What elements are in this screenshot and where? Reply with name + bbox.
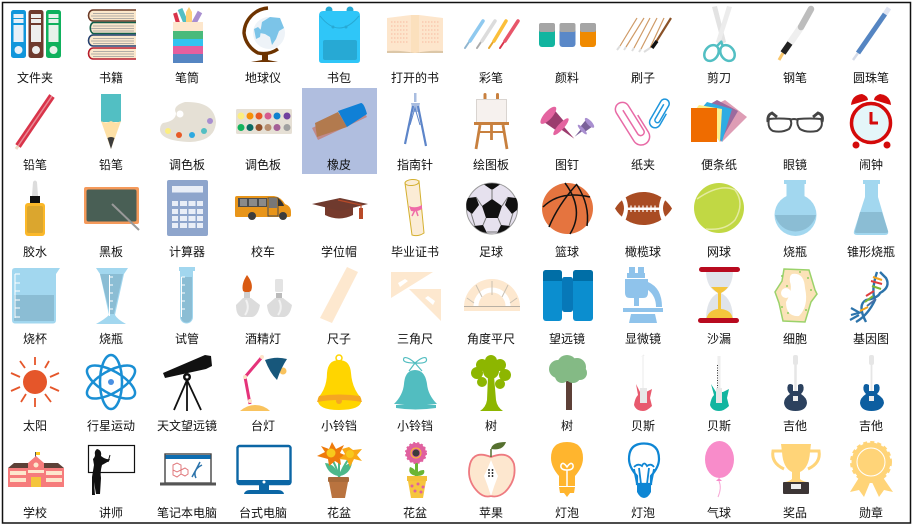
label: 调色板 — [169, 158, 205, 172]
label: 地球仪 — [245, 71, 281, 85]
label: 绘图板 — [473, 157, 509, 172]
cell: eraser — [312, 103, 367, 172]
cell: microscope — [623, 267, 663, 346]
icon: balloon — [705, 441, 734, 497]
cell: hourglass — [698, 267, 740, 346]
cell: desktop computer — [237, 446, 291, 520]
label: 灯泡 — [555, 506, 579, 520]
icon: open book — [387, 15, 443, 53]
label: 烧瓶 — [783, 245, 807, 259]
label: 花盆 — [403, 505, 427, 520]
label: 吉他 — [859, 419, 883, 433]
cell: diploma — [391, 179, 439, 259]
label: 计算器 — [169, 244, 205, 259]
label: 铅笔 — [99, 157, 123, 172]
cell: trophy — [773, 444, 819, 520]
label: 小铃铛 — [321, 418, 357, 433]
cell: teal bass — [707, 356, 731, 433]
cell: red pencil — [16, 96, 52, 172]
icon: test tube — [179, 267, 195, 324]
icon: apple — [469, 442, 515, 496]
cell: soccer ball — [466, 183, 518, 259]
cell: palette — [160, 102, 216, 172]
icon: teal bass — [710, 356, 729, 411]
icon: binoculars — [543, 270, 593, 321]
cell: desk lamp — [240, 355, 287, 433]
cell: paper clips — [613, 97, 673, 172]
icon: biological cell — [775, 269, 817, 322]
label: 调色板 — [245, 158, 281, 172]
icon: lecturer — [88, 446, 134, 495]
cell: apple — [469, 442, 515, 520]
icon: beaker — [12, 268, 60, 324]
icon: sun — [11, 357, 59, 407]
icon: astronomical telescope — [163, 355, 212, 411]
label: 台式电脑 — [239, 505, 287, 520]
label: 刷子 — [631, 71, 655, 85]
label: 贝斯 — [631, 419, 655, 433]
label: 天文望远镜 — [157, 418, 217, 433]
icon: teal bell with bow — [394, 358, 437, 410]
cell: fountain pen — [779, 9, 811, 85]
cell: atom — [82, 355, 140, 433]
icon: globe — [244, 8, 285, 62]
cell: test tube — [175, 267, 199, 346]
cell: balloon — [705, 441, 734, 520]
icon: flower pot — [317, 442, 362, 498]
icon: eraser — [312, 103, 367, 140]
icon: paint — [539, 23, 596, 47]
cell: ballpoint pen — [853, 8, 889, 85]
icon: yellow bell — [317, 355, 362, 410]
cell: protractor — [464, 279, 520, 346]
cell: teal pencil — [99, 94, 123, 172]
icon: conical flask — [854, 180, 888, 235]
cell: ruler — [320, 267, 358, 346]
label: 指南针 — [397, 157, 433, 172]
cell: flower pot — [317, 442, 362, 520]
label: 篮球 — [555, 244, 579, 259]
icon: books — [88, 10, 136, 59]
icon: paper clips — [613, 97, 673, 148]
icon: protractor — [464, 279, 520, 311]
label: 显微镜 — [625, 331, 661, 346]
cell: basketball — [542, 183, 593, 259]
label: 纸夹 — [631, 158, 655, 172]
cell: yellow bulb — [551, 442, 583, 520]
cell: red bass — [631, 355, 655, 433]
label: 贝斯 — [707, 419, 731, 433]
cell: school — [8, 452, 64, 520]
label: 黑板 — [99, 245, 123, 259]
cell: conical flask — [847, 180, 895, 259]
icon: medal — [850, 442, 893, 497]
icon: red bass — [634, 355, 652, 411]
cell: pen holder — [173, 7, 203, 85]
icon: push pins — [538, 104, 596, 147]
cell: laptop — [157, 454, 217, 520]
icon: watercolour set — [236, 109, 292, 134]
label: 闹钟 — [859, 157, 883, 172]
icon: fountain pen — [779, 9, 811, 60]
icon: round flask — [774, 180, 816, 236]
icon: yellow bulb — [551, 442, 583, 497]
icon: blackboard — [84, 187, 139, 230]
cell: biological cell — [775, 269, 817, 346]
label: 钢笔 — [783, 70, 807, 85]
cell: alcohol lamps — [236, 275, 292, 346]
label: 试管 — [175, 331, 199, 346]
icon: sticky notes — [691, 100, 747, 142]
label: 橄榄球 — [625, 244, 661, 259]
label: 胶水 — [23, 244, 47, 259]
icon: school — [8, 452, 64, 487]
cell: coloured pens — [465, 21, 518, 85]
icon: alcohol lamps — [236, 275, 292, 317]
icon: laptop — [160, 454, 216, 486]
label: 细胞 — [783, 332, 807, 346]
cell: yellow bell — [317, 355, 362, 433]
cell: blue bulb — [629, 444, 659, 520]
cell: blue guitar — [859, 355, 884, 433]
cell: watercolour set — [236, 109, 292, 172]
cell: flower pot with pink flower — [403, 443, 427, 520]
cell: lecturer — [88, 446, 134, 520]
icon: DNA — [850, 272, 888, 322]
icon: navy guitar — [784, 355, 807, 411]
cell: DNA — [850, 272, 889, 346]
label: 吉他 — [783, 419, 807, 433]
icon: school bus — [235, 196, 291, 220]
label: 行星运动 — [87, 419, 135, 433]
icon: desk lamp — [240, 355, 287, 411]
cell: brushes — [617, 18, 671, 85]
label: 锥形烧瓶 — [847, 245, 895, 259]
label: 烧杯 — [23, 332, 47, 346]
cell: set squares — [391, 272, 441, 346]
cell: beaker — [12, 268, 60, 346]
icon: glasses — [768, 113, 822, 132]
icon: green tree — [471, 355, 511, 411]
icon: blue bulb — [629, 444, 659, 498]
cell: teal bell with bow — [394, 358, 437, 433]
label: 书籍 — [99, 70, 123, 85]
cell: school bus — [235, 196, 291, 259]
icon: teal pencil — [101, 94, 121, 149]
icon: round tree — [549, 355, 587, 410]
icon: school bag — [319, 6, 360, 63]
label: 讲师 — [99, 505, 123, 520]
icon: graduation cap — [312, 198, 368, 219]
label: 学校 — [23, 505, 47, 520]
label: 树 — [485, 418, 497, 433]
label: 沙漏 — [707, 332, 731, 346]
label: 烧瓶 — [99, 332, 123, 346]
cell: calculator — [167, 180, 208, 259]
cell: round tree — [549, 355, 587, 433]
icon: scissors — [701, 6, 738, 64]
label: 书包 — [327, 71, 351, 85]
icon: atom — [82, 355, 140, 409]
label: 剪刀 — [707, 70, 731, 85]
cell: measuring flask — [96, 268, 128, 346]
label: 尺子 — [327, 332, 351, 346]
cell: medal — [850, 442, 893, 520]
label: 颜料 — [555, 70, 579, 85]
icon: measuring flask — [96, 268, 128, 324]
label: 圆珠笔 — [853, 70, 889, 85]
label: 奖品 — [783, 506, 807, 520]
label: 打开的书 — [391, 70, 439, 85]
icon: red pencil — [16, 96, 52, 149]
icon: soccer ball — [466, 183, 518, 234]
icon: palette — [160, 102, 216, 142]
cell: easel — [473, 93, 509, 172]
label: 灯泡 — [631, 506, 655, 520]
cell: sun — [11, 357, 59, 433]
cell: scissors — [701, 6, 738, 85]
label: 小铃铛 — [397, 418, 433, 433]
label: 三角尺 — [397, 332, 433, 346]
cell: astronomical telescope — [157, 355, 217, 433]
cell: navy guitar — [783, 355, 807, 433]
cell: glasses — [768, 113, 822, 172]
label: 彩笔 — [479, 70, 503, 85]
label: 气球 — [707, 505, 731, 520]
label: 望远镜 — [549, 331, 585, 346]
label: 太阳 — [23, 418, 47, 433]
cell: globe — [244, 8, 285, 85]
icon: desktop computer — [237, 446, 291, 494]
label: 酒精灯 — [245, 332, 281, 346]
cell: folders — [11, 10, 61, 85]
cell: tennis ball — [694, 183, 744, 259]
label: 角度平尺 — [467, 331, 515, 346]
cell: push pins — [538, 104, 596, 172]
cell: graduation cap — [312, 198, 368, 259]
label: 学位帽 — [321, 244, 357, 259]
label: 校车 — [251, 244, 275, 259]
cell: glue — [23, 180, 47, 259]
cell: round flask — [774, 180, 816, 259]
icon: ballpoint pen — [853, 8, 889, 60]
label: 苹果 — [479, 506, 503, 520]
label: 基因图 — [853, 332, 889, 346]
label: 树 — [561, 418, 573, 433]
icon: glue — [25, 180, 45, 236]
icon: brushes — [617, 18, 671, 52]
label: 图钉 — [555, 158, 579, 172]
cell: sticky notes — [691, 100, 747, 172]
icon: compass — [405, 93, 426, 146]
icon: microscope — [623, 267, 663, 323]
icon: calculator — [167, 180, 208, 236]
icon: blue guitar — [860, 355, 884, 411]
label: 花盆 — [327, 505, 351, 520]
icon: easel — [474, 93, 509, 149]
label: 笔筒 — [175, 70, 199, 85]
cell: books — [88, 10, 136, 85]
label: 铅笔 — [23, 157, 47, 172]
label: 网球 — [707, 245, 731, 259]
icon: ruler — [320, 267, 358, 323]
icon: set squares — [391, 272, 441, 321]
label: 台灯 — [251, 418, 275, 433]
cell: blackboard — [84, 187, 139, 259]
cell: football — [615, 192, 672, 259]
icon: football — [615, 192, 672, 225]
label: 毕业证书 — [391, 245, 439, 259]
cell: binoculars — [543, 270, 593, 346]
cell: school bag — [319, 6, 360, 85]
label: 便条纸 — [701, 158, 737, 172]
icon: pen holder — [173, 7, 203, 63]
icon: diploma — [405, 179, 424, 236]
icon: basketball — [542, 183, 593, 234]
icon: folders — [11, 10, 61, 58]
label: 勋章 — [859, 505, 883, 520]
icon: hourglass — [698, 267, 740, 323]
label: 笔记本电脑 — [157, 505, 217, 520]
cell: paint — [539, 23, 596, 85]
cell: compass — [397, 93, 433, 172]
icon: alarm clock — [851, 94, 891, 148]
cell: alarm clock — [851, 94, 891, 172]
label: 橡皮 — [327, 158, 351, 172]
cell: green tree — [471, 355, 511, 433]
label: 眼镜 — [783, 157, 807, 172]
highlight: selected eraser cell — [302, 88, 377, 174]
icon: trophy — [773, 444, 819, 494]
cell: open book — [387, 15, 443, 85]
icon: tennis ball — [694, 183, 744, 233]
label: 文件夹 — [17, 70, 53, 85]
icon: coloured pens — [465, 21, 518, 48]
label: 足球 — [479, 245, 503, 259]
icon: flower pot with pink flower — [406, 443, 427, 498]
